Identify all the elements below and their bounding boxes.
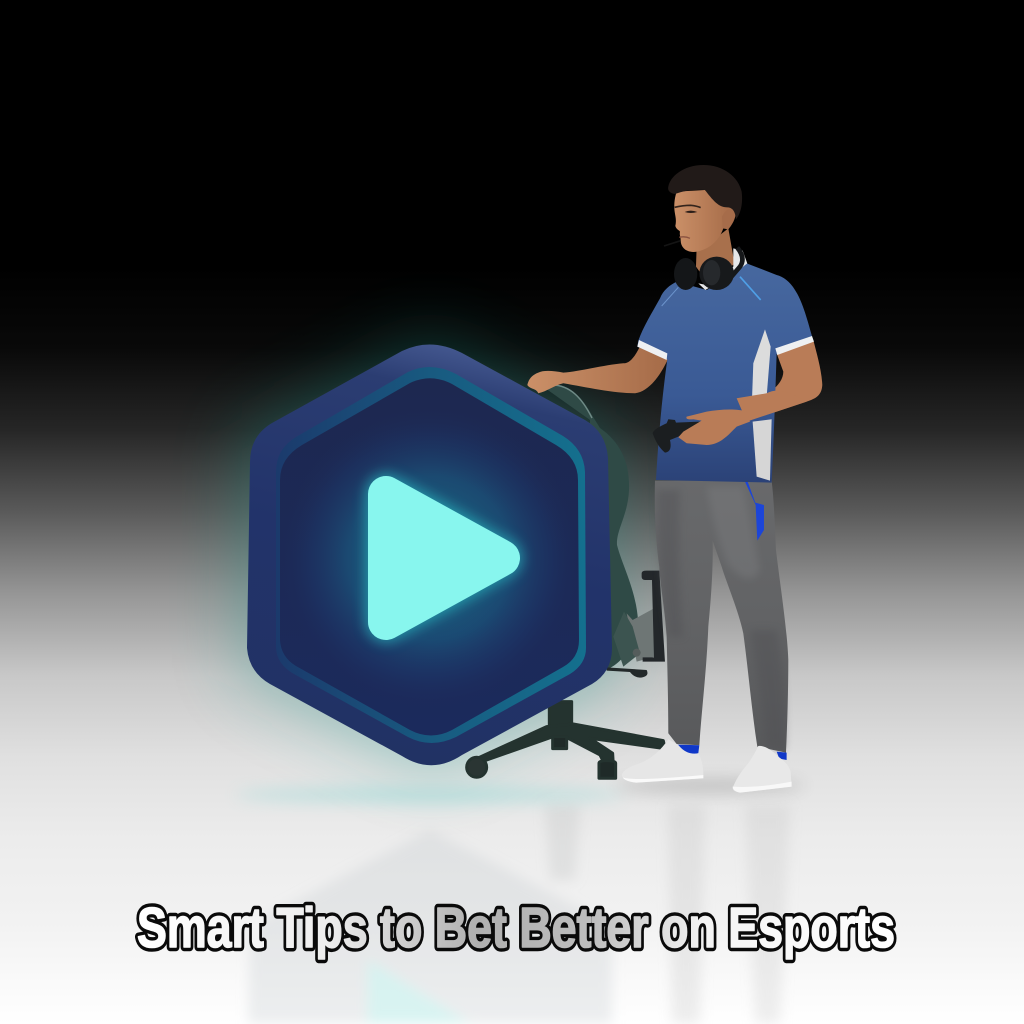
upper body — [527, 165, 822, 483]
trouser shading — [657, 490, 785, 750]
play triangle — [386, 494, 502, 622]
gaming chair — [467, 385, 665, 778]
lower body: trousers and shoes — [622, 481, 792, 793]
right shoe — [733, 746, 792, 793]
floor reflection — [248, 805, 790, 1024]
microphone — [664, 241, 681, 246]
collar — [698, 248, 747, 290]
chair armrest and mechanism — [607, 571, 665, 678]
hair — [668, 165, 742, 219]
game controller — [653, 419, 700, 453]
hexagon teal inset ring — [276, 367, 586, 743]
chair base — [467, 702, 665, 778]
socks — [677, 745, 699, 754]
right arm — [737, 340, 822, 422]
chair back sheen — [552, 385, 592, 418]
left shoe sole — [623, 775, 703, 783]
trouser highlight — [707, 487, 760, 579]
play hexagon badge — [247, 344, 612, 765]
triangle halo — [386, 494, 502, 622]
headphones — [730, 248, 742, 278]
forearm over shirt — [737, 391, 807, 422]
person — [527, 165, 822, 793]
left arm — [527, 345, 668, 393]
white cuffs — [637, 340, 667, 360]
trousers — [655, 481, 788, 753]
blue piping — [740, 277, 761, 300]
chair back — [545, 385, 638, 668]
eye brow — [675, 205, 701, 208]
left shoe — [622, 739, 703, 783]
trouser pocket stripe — [745, 482, 764, 541]
hexagon inner face — [280, 378, 579, 736]
neck — [696, 228, 738, 282]
ear — [722, 209, 736, 229]
teal glow behind hexagon — [240, 335, 620, 775]
hexagon outer rim — [247, 344, 612, 765]
right shoe sole — [733, 782, 792, 793]
right hand — [678, 409, 750, 445]
face — [674, 190, 733, 252]
floor shadow — [235, 788, 625, 802]
lips — [679, 237, 690, 238]
t-shirt — [637, 263, 813, 483]
triangle glow on face — [280, 378, 579, 736]
white side panel — [752, 329, 771, 400]
eye — [685, 211, 697, 213]
